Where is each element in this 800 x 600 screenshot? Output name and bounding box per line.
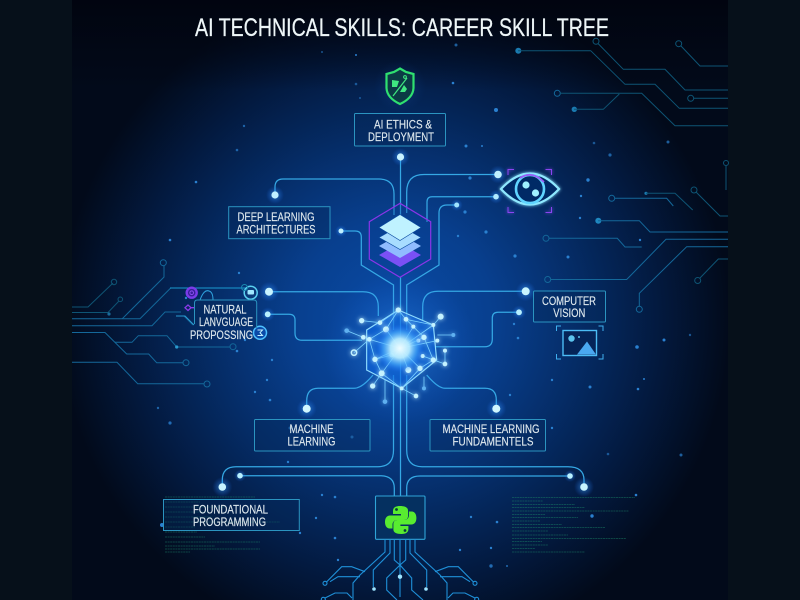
label box: Foundational Programming — [164, 500, 299, 530]
icon: eye — [501, 170, 559, 212]
label box: Natural Language Processing: LANVGUAGE — [199, 315, 253, 329]
label box: Natural Language Processing: NATURAL — [204, 302, 247, 316]
label box: Machine Learning Fundamentals: MACHINE LEARNING — [442, 422, 540, 436]
skill tree connector lines — [222, 157, 584, 497]
label box: AI Ethics & Deployment: AI ETHICS & — [374, 118, 433, 132]
nodes: upper branches — [266, 166, 507, 237]
label box: Machine Learning: LEARNING — [288, 434, 336, 448]
label box: Natural Language Processing: PROPOSSING — [190, 328, 253, 342]
label box: Foundational Programming: FOUNDATIONAL — [193, 502, 268, 516]
label box: Foundational Programming: PROGRAMMING — [193, 515, 266, 529]
label box: AI Ethics & Deployment: DEPLOYMENT — [368, 130, 434, 144]
label box: Deep Learning Architectures: DEEP LEARNING — [238, 210, 314, 224]
label box: Deep Learning Architectures: ARCHITECTURES — [236, 222, 316, 236]
label box: Machine Learning Fundamentals — [430, 420, 546, 451]
label box: Machine Learning: MACHINE — [290, 422, 334, 436]
label box: Computer Vision — [534, 291, 606, 322]
icon: ethics shield — [374, 60, 426, 112]
code snippet right — [512, 498, 635, 552]
icons: natural language processing cluster — [170, 284, 266, 339]
scattered particles — [157, 44, 691, 568]
label box: Computer Vision: COMPUTER — [542, 294, 596, 308]
label box: AI Ethics & Deployment — [354, 114, 446, 146]
icon: neural network layers hexagon — [369, 203, 431, 277]
nodes: middle branches — [259, 281, 536, 419]
icon: central neural network — [323, 272, 477, 425]
label box: Deep Learning Architectures — [229, 207, 330, 239]
icon: image frame — [556, 326, 603, 359]
background circuit traces left — [72, 260, 236, 387]
background circuit traces right — [515, 38, 728, 312]
label box: Machine Learning Fundamentals: FUNDAMENTELS — [452, 434, 534, 448]
title: AI TECHNICAL SKILLS: CAREER SKILL TREE — [195, 14, 609, 42]
circuit roots — [321, 539, 479, 600]
label box: Machine Learning — [254, 420, 370, 451]
node: ethics — [392, 148, 410, 166]
label box: Natural Language Processing — [190, 300, 257, 342]
icon: python chip — [376, 496, 425, 539]
nodes: foundation branches — [212, 470, 594, 497]
code snippet left — [165, 497, 280, 552]
label box: Computer Vision: VISION — [553, 306, 585, 320]
